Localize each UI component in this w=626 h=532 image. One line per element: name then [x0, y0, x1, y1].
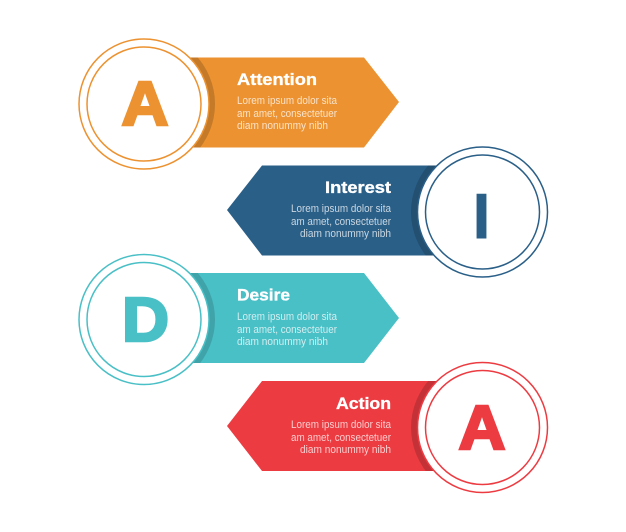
panel: attention	[73, 33, 399, 175]
outer ring: interest	[418, 147, 548, 277]
body text: attention	[237, 95, 338, 132]
outer ring: desire	[79, 254, 209, 384]
arrow banner: interest	[227, 166, 482, 256]
outer ring: attention	[79, 39, 209, 169]
outer ring: action	[418, 362, 548, 492]
letter D: D	[122, 286, 169, 355]
body text: interest: diam nonummy nibh	[300, 228, 391, 240]
inner ring: desire	[87, 262, 201, 376]
heading: Desire: Desire	[237, 286, 290, 304]
body text: action: am amet, consectetuer	[291, 432, 391, 444]
inner ring: action	[426, 370, 540, 484]
panel: action	[227, 356, 554, 499]
circle shadow: desire	[190, 273, 215, 363]
body text: desire: diam nonummy nibh	[237, 336, 328, 348]
heading: Attention: Attention	[237, 70, 317, 89]
body text: action: diam nonummy nibh	[300, 444, 391, 456]
letter A: A	[122, 70, 168, 139]
body text: desire: am amet, consectetuer	[237, 324, 337, 336]
body text: desire: Lorem ipsum dolor sita	[237, 311, 338, 323]
arrow banner: desire	[144, 273, 399, 363]
letter A: A	[458, 394, 506, 463]
body text: interest: Lorem ipsum dolor sita	[291, 203, 392, 215]
panel: interest	[227, 140, 554, 284]
heading: Interest: Interest	[325, 178, 391, 197]
body text: attention: diam nonummy nibh	[237, 120, 328, 132]
body text: action	[291, 419, 392, 456]
inner ring: attention	[87, 47, 201, 161]
inner ring: interest	[426, 155, 540, 269]
panel: desire	[73, 248, 399, 390]
body text: attention: am amet, consectetuer	[237, 108, 337, 120]
circle shadow: action	[411, 381, 436, 471]
heading: Action: Action	[336, 394, 391, 413]
body text: interest	[291, 203, 392, 240]
body text: attention: Lorem ipsum dolor sita	[237, 95, 338, 107]
arrow banner: action	[227, 381, 482, 471]
body text: interest: am amet, consectetuer	[291, 216, 391, 228]
circle shadow: interest	[411, 166, 436, 256]
arrow banner: attention	[144, 58, 399, 148]
circle shadow: attention	[190, 58, 215, 148]
body text: desire	[237, 311, 338, 348]
body text: action: Lorem ipsum dolor sita	[291, 419, 392, 431]
letter I: I	[472, 180, 491, 252]
